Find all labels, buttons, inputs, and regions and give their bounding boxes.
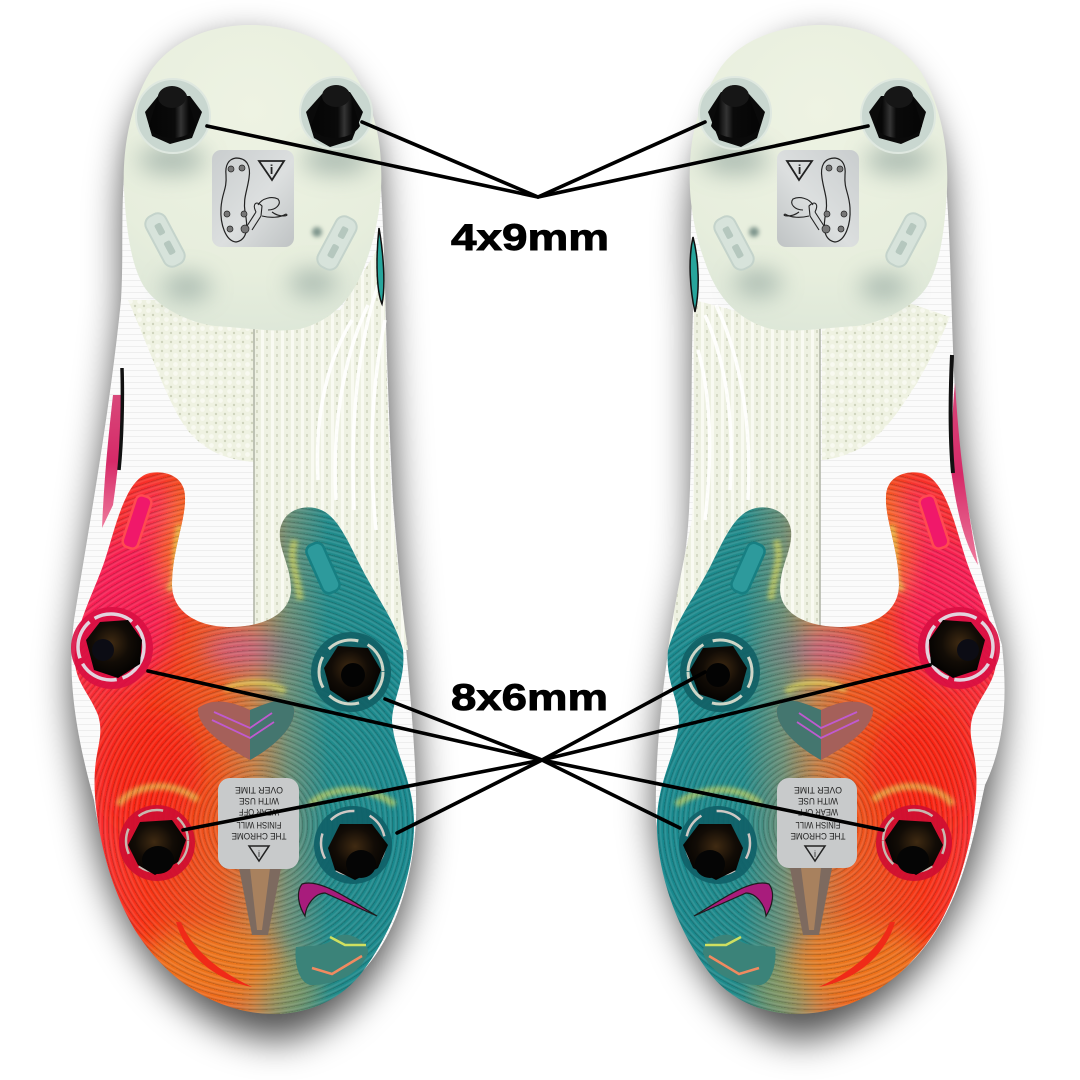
left knit panel (128, 300, 254, 462)
left boot upper (71, 27, 418, 1040)
heel-side prong slot left (121, 494, 153, 550)
right silhouette (656, 27, 1005, 1012)
sticker warning triangle: i (258, 849, 260, 859)
leader lines: heel studs (207, 122, 868, 197)
sticker copy: THE CHROME (790, 830, 846, 841)
sticker: wrench and hand (247, 198, 287, 230)
plate ridges (60, 460, 430, 1030)
teal side accent (377, 228, 384, 304)
stud: inner toe (314, 806, 392, 884)
dark dot near blade (312, 227, 322, 237)
plate colour blooms (75, 475, 320, 1015)
left silhouette (71, 27, 416, 1014)
white upper streaks (317, 285, 385, 530)
sticker copy: OVER TIME (794, 784, 842, 795)
pink side strip (102, 395, 123, 528)
heel stud shadows (138, 146, 370, 300)
right boot upper (655, 27, 1005, 1040)
right boot black stripe (951, 355, 953, 473)
sticker copy: OVER TIME (235, 784, 283, 795)
sticker copy (790, 784, 846, 841)
heel blade right (314, 213, 360, 273)
right boot knit: medial (668, 300, 820, 650)
centre triangle (239, 868, 281, 935)
chrome warning sticker left (218, 778, 299, 869)
right boot knit: lateral (820, 300, 950, 460)
swoosh logo (298, 883, 377, 916)
sticker copy: WITH USE (239, 795, 279, 806)
centre seam (253, 320, 255, 628)
right boot seam (819, 325, 821, 628)
stud: outer forefoot (71, 607, 153, 689)
chrome warning sticker right (777, 778, 857, 868)
black side stripe (119, 368, 122, 470)
right knit panel (254, 240, 408, 650)
sticker: warning triangle: i (270, 162, 273, 177)
right boot sole (mirrored) (641, 25, 1011, 1030)
heel stud right (300, 77, 372, 149)
sticker copy: WEAR OFF (239, 806, 279, 817)
sticker copy: FINISH WILL (796, 819, 840, 830)
sticker warning triangle: i (814, 849, 816, 859)
right boot white streaks (698, 305, 749, 520)
prong slot right (304, 541, 342, 595)
soleplate (60, 460, 430, 1030)
sticker copy: THE CHROME (232, 830, 286, 841)
leader lines: forefoot studs (148, 665, 930, 833)
stud: outer toe (119, 805, 195, 881)
left boot sole (60, 25, 430, 1030)
heel plate (124, 25, 381, 331)
label: 8x6mm: 8x6mm (451, 677, 608, 718)
sticker copy: WEAR OFF (798, 806, 838, 817)
sticker copy: WITH USE (798, 795, 838, 806)
toe chevron pad (296, 935, 368, 985)
label: 4x9mm: 4x9mm (451, 217, 609, 258)
left boot shadow (72, 40, 418, 1040)
midfoot chevron pad (198, 701, 294, 760)
heel stud left (136, 79, 210, 153)
sticker copy (232, 784, 286, 841)
right boot shadow (655, 40, 1002, 1040)
sticker copy: FINISH WILL (236, 819, 282, 830)
iridescent highlights (118, 525, 395, 805)
heel blade left (142, 210, 188, 270)
outer toe arc (176, 922, 252, 987)
right boot pink strip (951, 383, 978, 565)
sticker: stud dots (224, 165, 249, 233)
heel instruction sticker (212, 150, 294, 247)
right boot teal accent (690, 237, 698, 312)
stud: inner forefoot (311, 632, 391, 712)
sticker: foot outline (221, 158, 249, 242)
